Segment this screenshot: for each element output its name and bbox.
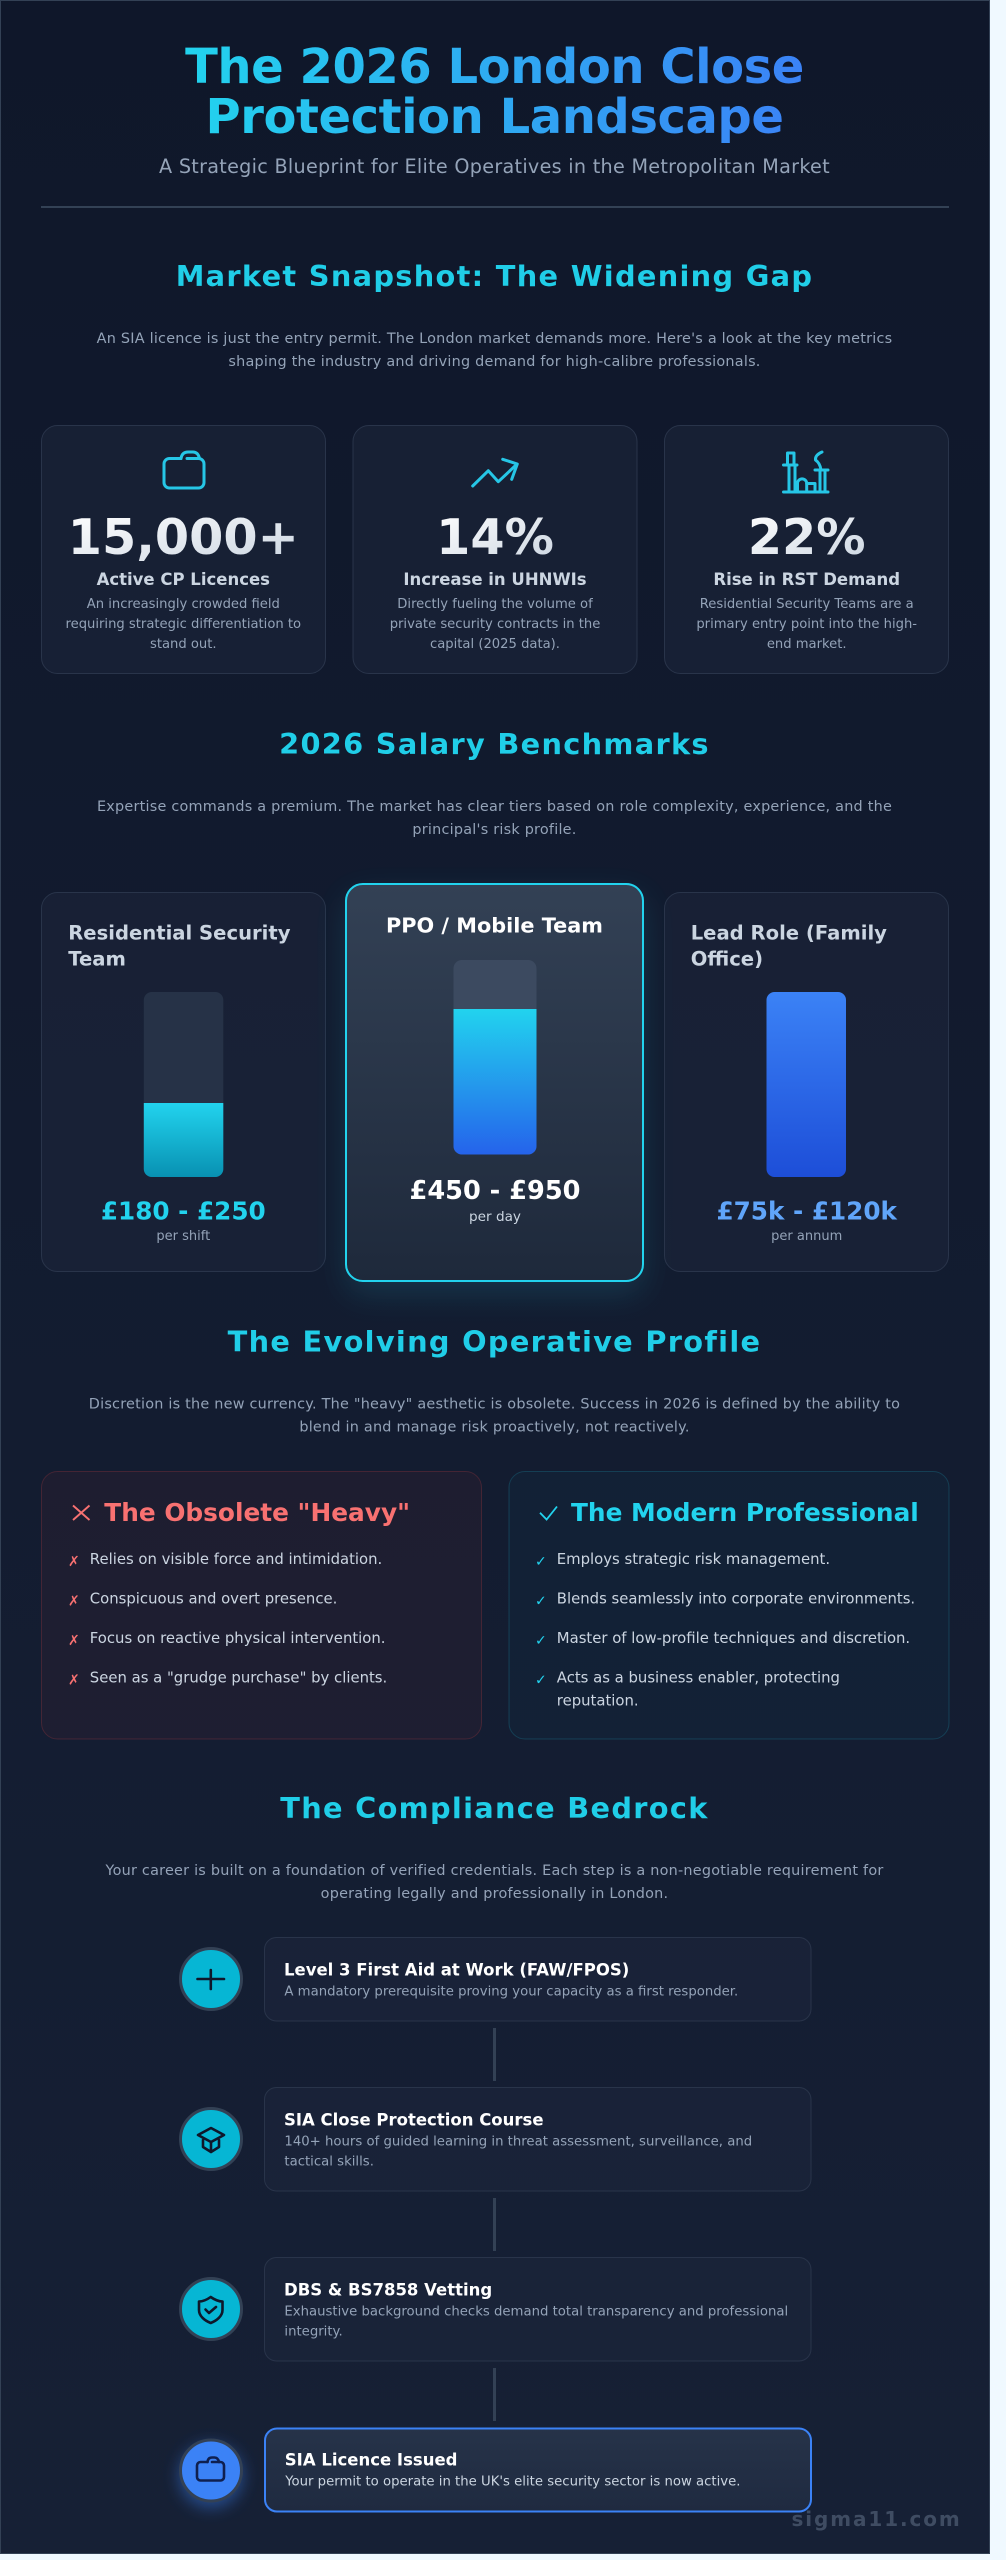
- panel title: The Modern Professional: [571, 1498, 919, 1527]
- salary value: £450 - £950: [410, 1176, 580, 1206]
- step card: A mandatory prerequisite proving your capacity as a first responder.: [284, 1985, 738, 2000]
- icon: briefcase in blue circle: [179, 2440, 243, 2508]
- intro text: market snapshot: An SIA licence is just the entry permit. The London market demands more. Here's a look at the key metrics: [97, 331, 892, 347]
- step card: 140+ hours of guided learning in threat assessment, surveillance, and: [284, 2135, 752, 2150]
- salary unit: per shift: [156, 1229, 210, 1244]
- stat description: primary entry point into the high-: [696, 617, 917, 632]
- salary value: £75k - £120k: [716, 1196, 898, 1226]
- intro text: salary benchmarks: principal's risk profile.: [412, 822, 577, 838]
- intro text: operative profile: Discretion is the new currency. The "heavy" aesthetic is obsolete. Success in 2026 is defined by the ability to: [89, 1396, 900, 1412]
- intro text: operative profile: blend in and manage risk proactively, not reactively.: [299, 1420, 690, 1436]
- stat description: Directly fueling the volume of: [397, 597, 593, 612]
- arrow: connector 2: [493, 2198, 496, 2251]
- role title: Lead Role (Family: [691, 922, 887, 944]
- step 4: licence issued: [179, 2428, 811, 2512]
- step card: integrity.: [284, 2324, 343, 2340]
- stat card: UHNWIs: [353, 426, 637, 674]
- list: modern traits: ✓: [535, 1633, 547, 1649]
- intro text: salary benchmarks: Expertise commands a premium. The market has clear tiers based on role complexity, experience, and the: [97, 799, 892, 815]
- list: obsolete traits: Focus on reactive physical intervention.: [90, 1629, 386, 1647]
- stat description: Residential Security Teams are a: [700, 597, 914, 612]
- step card: SIA Close Protection Course: [284, 2111, 544, 2130]
- intro text: market snapshot: shaping the industry and driving demand for high-calibre professionals.: [228, 354, 761, 370]
- stat description: An increasingly crowded field: [87, 597, 280, 612]
- step card highlighted: Your permit to operate in the UK's elite security sector is now active.: [284, 2475, 740, 2490]
- salary bar: [766, 992, 846, 1177]
- section: compliance bedrock: [104, 1791, 884, 2512]
- role title: Residential Security: [68, 922, 291, 944]
- salary bar: [144, 992, 223, 1177]
- list: modern traits: [535, 1550, 915, 1710]
- role title: Team: [68, 948, 126, 970]
- section: salary benchmarks: [42, 727, 948, 1294]
- step 1: first aid: [180, 1938, 811, 2021]
- stat label: Increase in UHNWIs: [403, 570, 587, 589]
- stat description: stand out.: [150, 637, 217, 652]
- role title: Office): [691, 948, 763, 970]
- step 2: SIA course: [180, 2088, 811, 2191]
- step card: [264, 2258, 811, 2361]
- list: modern traits: Employs strategic risk management.: [557, 1550, 830, 1568]
- step card: Level 3 First Aid at Work (FAW/FPOS): [284, 1961, 629, 1980]
- list: obsolete traits: Conspicuous and overt presence.: [90, 1590, 337, 1608]
- icon: check: [540, 1506, 557, 1520]
- stat description: capital (2025 data).: [430, 637, 560, 652]
- icon: cross: [73, 1506, 90, 1520]
- stat description: requiring strategic differentiation to: [66, 617, 301, 632]
- step 3: vetting: [180, 2258, 811, 2361]
- icon: plus in circle: [180, 1948, 242, 2010]
- salary card: lead role: [664, 892, 948, 1272]
- list: obsolete traits: ✗: [68, 1633, 80, 1649]
- header: [41, 39, 949, 208]
- salary unit: per annum: [771, 1229, 842, 1244]
- list: obsolete traits: Seen as a "grudge purchase" by clients.: [90, 1668, 387, 1686]
- icon: skyline: [784, 452, 828, 492]
- intro text: compliance bedrock: Your career is built on a foundation of verified credentials. Each step is a non-negotiable requirement for: [104, 1863, 884, 1879]
- stat card: active CP licences: [42, 426, 326, 674]
- list: modern traits: Blends seamlessly into corporate environments.: [557, 1590, 915, 1608]
- icon: graduation cap in circle: [180, 2108, 242, 2170]
- heading: operative profile: The Evolving Operative Profile: [228, 1325, 761, 1359]
- step card: tactical skills.: [284, 2155, 374, 2170]
- stat: 15,000+: 15,000+: [68, 508, 299, 566]
- list: modern traits: ✓: [535, 1672, 547, 1688]
- icon: trend arrow: [473, 459, 517, 486]
- arrow: connector 3: [493, 2368, 496, 2421]
- stat: 14%: 14%: [436, 508, 554, 566]
- heading: market snapshot: Market Snapshot: The Widening Gap: [176, 259, 813, 293]
- list: obsolete traits: Relies on visible force and intimidation.: [90, 1550, 382, 1568]
- list: obsolete traits: ✗: [68, 1594, 80, 1610]
- intro text: compliance bedrock: operating legally and professionally in London.: [321, 1886, 668, 1902]
- list: modern traits: ✓: [535, 1594, 547, 1610]
- step card highlighted: [265, 2428, 811, 2512]
- salary unit: per day: [469, 1209, 521, 1225]
- section: operative profile: [42, 1325, 949, 1739]
- stat label: Rise in RST Demand: [713, 570, 900, 589]
- salary card: residential security team: [42, 892, 326, 1272]
- stat: 22%: 22%: [748, 508, 866, 566]
- list: modern traits: Master of low-profile techniques and discretion.: [557, 1629, 910, 1647]
- panel: the obsolete heavy: [42, 1472, 482, 1739]
- stat card: RST demand: [664, 426, 948, 674]
- arrow: connector 1: [493, 2028, 496, 2081]
- heading: compliance bedrock: The Compliance Bedrock: [280, 1791, 709, 1825]
- panel title: The Obsolete "Heavy": [104, 1498, 410, 1527]
- list: modern traits: reputation.: [557, 1692, 639, 1710]
- stat label: Active CP Licences: [97, 570, 270, 589]
- list: obsolete traits: ✗: [68, 1554, 80, 1570]
- stat description: end market.: [767, 637, 847, 652]
- step card highlighted: SIA Licence Issued: [285, 2451, 457, 2470]
- title: Protection Landscape: [206, 89, 783, 145]
- panel: the modern professional: [509, 1472, 949, 1739]
- title: The 2026 London Close: [185, 39, 804, 95]
- icon: briefcase: [164, 452, 204, 488]
- stat description: private security contracts in the: [390, 617, 600, 632]
- salary value: £180 - £250: [101, 1196, 266, 1226]
- heading: salary benchmarks: 2026 Salary Benchmarks: [279, 727, 710, 761]
- role title: PPO / Mobile Team: [386, 914, 603, 938]
- list: modern traits: ✓: [535, 1554, 547, 1570]
- list: obsolete traits: ✗: [68, 1672, 80, 1688]
- icon: shield in circle: [180, 2278, 242, 2340]
- watermark: sigma11.com: [792, 2507, 962, 2531]
- step card: Exhaustive background checks demand total transparency and professional: [284, 2304, 788, 2320]
- salary bar: [454, 960, 536, 1154]
- list: obsolete traits: [68, 1550, 387, 1688]
- list: modern traits: Acts as a business enabler, protecting: [557, 1668, 840, 1686]
- section: market snapshot: [42, 259, 948, 674]
- subtitle: A Strategic Blueprint for Elite Operatives in the Metropolitan Market: [159, 155, 830, 178]
- step card: DBS & BS7858 Vetting: [284, 2280, 492, 2300]
- step card: [264, 2088, 811, 2191]
- step card: [264, 1938, 811, 2021]
- salary card: PPO / mobile team (highlighted): [346, 884, 644, 1294]
